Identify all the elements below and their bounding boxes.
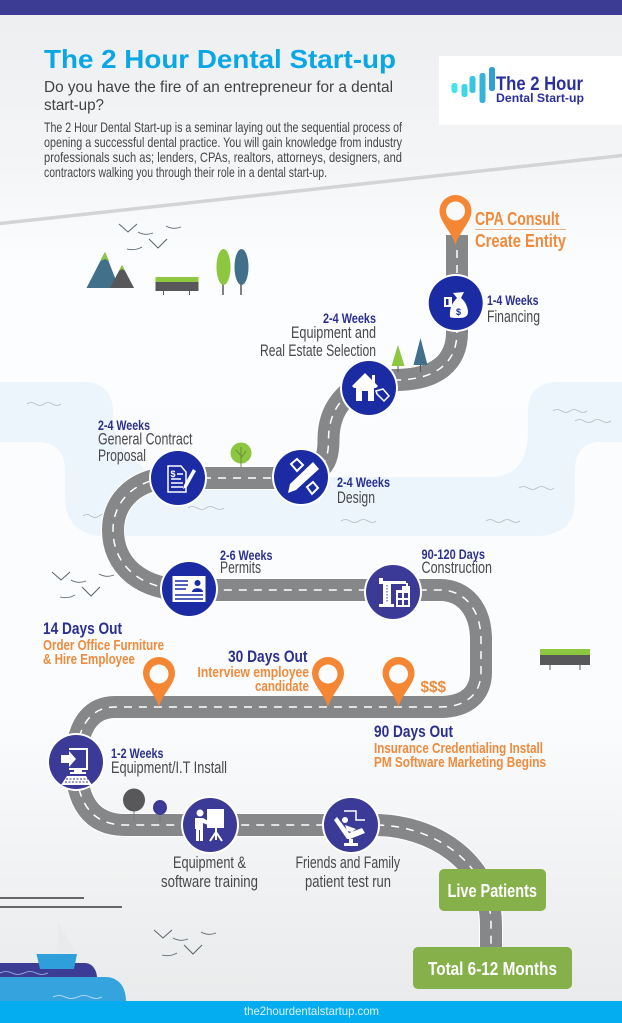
step: financing icon — [427, 274, 485, 332]
label: construction: 90-120 Days — [422, 546, 485, 562]
label: design: Design — [337, 489, 375, 507]
footer band: the2hourdentalstartup.com — [244, 1004, 379, 1018]
box: total — [413, 947, 572, 989]
label: 90 days out — [374, 722, 546, 771]
label: 30 days out: candidate — [255, 678, 309, 695]
step: permits icon — [160, 560, 218, 618]
road — [76, 235, 491, 960]
label: design: 2-4 Weeks — [337, 474, 390, 490]
label: equipment and real estate — [260, 310, 376, 360]
step: general contract icon — [149, 449, 207, 507]
heading: Create Entity: Create Entity — [475, 231, 566, 251]
step: general contract icon: $ — [170, 469, 176, 479]
box: live patients — [439, 869, 546, 911]
step: test run icon — [322, 796, 380, 854]
heading: CPA Consult: CPA Consult — [475, 209, 560, 229]
label: test run: Friends and Family — [296, 854, 401, 872]
label: test run — [296, 854, 401, 891]
label: permits: 2-6 Weeks — [220, 547, 273, 563]
label: construction: Construction — [422, 559, 492, 577]
step: construction icon — [364, 563, 422, 621]
label: equipment and real estate: 2-4 Weeks — [323, 310, 376, 326]
label: 14 days out: 14 Days Out — [43, 619, 122, 638]
label: equipment install: Equipment/I.T Install — [111, 759, 227, 777]
icon: start pin — [440, 195, 472, 245]
label: 30 days out: Interview employee — [198, 664, 309, 681]
birds bottom — [154, 930, 216, 956]
top band — [0, 0, 622, 15]
label: general contract: 2-4 Weeks — [98, 417, 150, 433]
step: equipment install icon — [47, 733, 105, 791]
subtitle — [44, 79, 393, 114]
step: training icon — [181, 796, 239, 854]
logo: Dental Start-up — [496, 91, 584, 105]
intro paragraph: contractors walking you through their role in a dental start-up. — [44, 164, 327, 180]
round tree — [230, 442, 252, 467]
boat — [0, 923, 126, 1002]
birds top — [119, 224, 181, 250]
label: 14 days out: & Hire Employee — [43, 651, 135, 668]
label: 30 days out: 30 Days Out — [228, 647, 308, 666]
label: financing: Financing — [487, 308, 540, 326]
subtitle: start-up? — [44, 97, 104, 114]
subtitle: Do you have the fire of an entrepreneur for a dental — [44, 79, 393, 96]
footer band — [0, 1001, 622, 1023]
wind lines — [0, 897, 122, 908]
label: 90 days out: Insurance Credentialing Install — [374, 740, 543, 757]
label: training — [161, 854, 258, 891]
label: financing: 1-4 Weeks — [487, 292, 539, 308]
label: equipment install: 1-2 Weeks — [111, 745, 164, 761]
bench — [156, 277, 198, 295]
logo: The 2 Hour — [496, 74, 584, 95]
intro paragraph — [44, 119, 402, 180]
step: equipment and real estate icon — [340, 359, 398, 417]
label: dollars: $$$ — [420, 679, 446, 696]
label: 14 days out: Order Office Furniture — [43, 637, 164, 654]
river background — [0, 382, 622, 536]
label: general contract: General Contract — [98, 430, 193, 448]
bench right — [540, 649, 590, 670]
label: test run: patient test run — [305, 873, 391, 891]
box: live patients: Live Patients — [448, 881, 537, 901]
label: general contract: Proposal — [98, 447, 146, 465]
birds middle — [52, 572, 114, 598]
intro paragraph: professionals such as; lenders, CPAs, realtors, attorneys, designers, and — [44, 149, 402, 165]
label: 30 days out — [198, 647, 309, 695]
label: training: Equipment & — [173, 854, 246, 872]
divider under CPA — [475, 229, 566, 230]
label: design — [337, 474, 390, 507]
icon: pin 14 days — [143, 657, 175, 707]
logo — [439, 56, 622, 125]
label: 90 days out: PM Software Marketing Begins — [374, 754, 546, 771]
icon: pin 30 days — [312, 657, 344, 707]
label: general contract — [98, 417, 193, 465]
label: permits — [220, 547, 273, 577]
label: construction — [422, 546, 492, 577]
intro paragraph: opening a successful dental practice. You will gain knowledge from industry — [44, 134, 402, 150]
label: training: software training — [161, 873, 258, 891]
diagonal divider — [0, 156, 622, 224]
icon: pin 90 days — [382, 657, 414, 707]
mountains — [86, 252, 134, 288]
label: equipment install — [111, 745, 227, 777]
box: total: Total 6-12 Months — [428, 959, 557, 979]
trees pair — [216, 249, 248, 295]
label: 14 days out — [43, 619, 164, 668]
small trees near road — [392, 338, 428, 372]
label: 90 days out: 90 Days Out — [374, 722, 453, 741]
label: permits: Permits — [220, 559, 261, 577]
label: equipment and real estate: Real Estate Selection — [260, 342, 376, 360]
label: financing — [487, 292, 540, 326]
step: financing icon: $ — [456, 307, 461, 317]
label: equipment and real estate: Equipment and — [291, 324, 376, 342]
intro paragraph: The 2 Hour Dental Start-up is a seminar laying out the sequential process of — [44, 119, 402, 135]
title: The 2 Hour Dental Start-up — [44, 44, 396, 74]
step: design icon — [272, 448, 330, 506]
round trees lower — [123, 788, 167, 822]
water ripples — [27, 402, 611, 522]
